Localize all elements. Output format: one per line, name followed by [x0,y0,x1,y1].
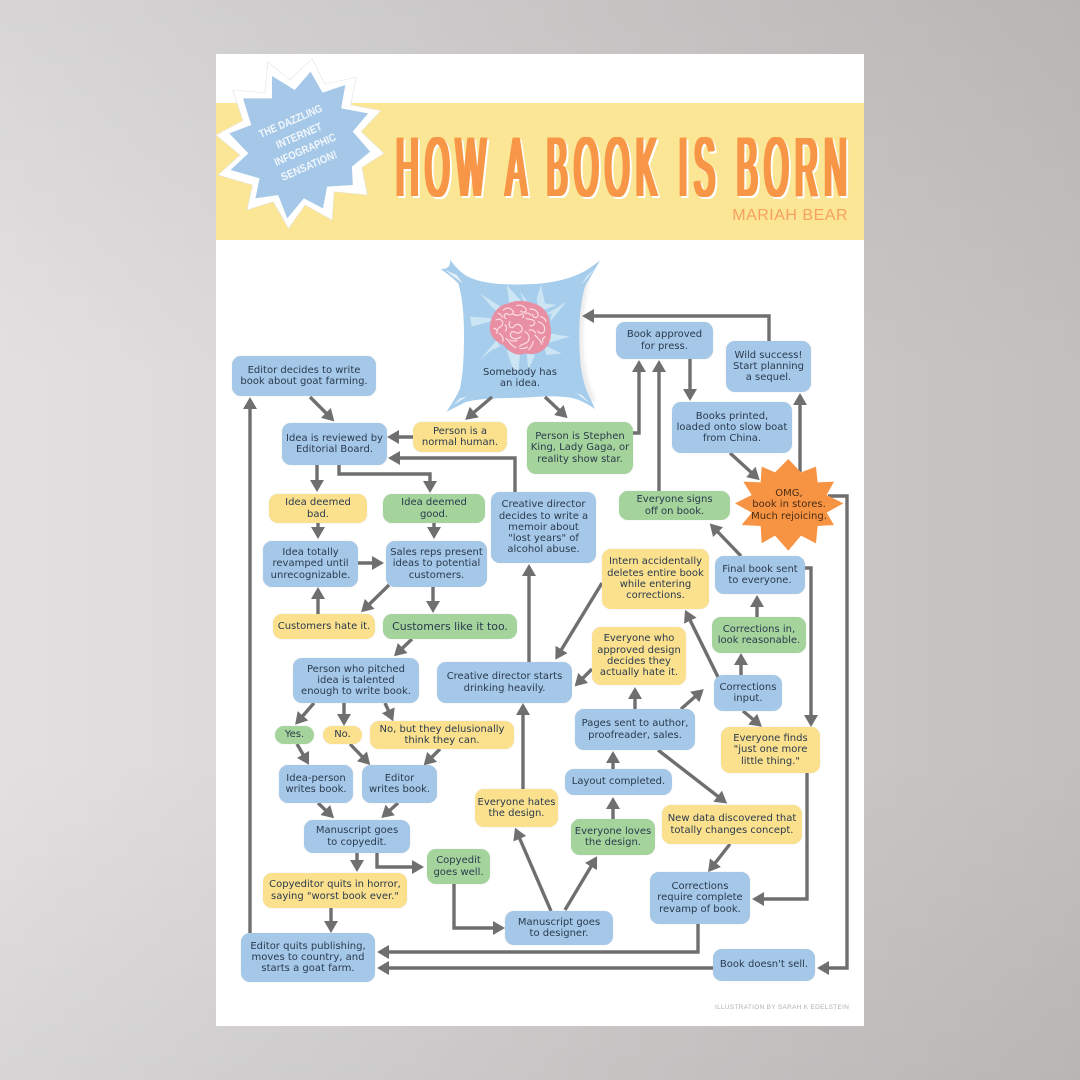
box: revamp: require complete [657,892,743,903]
box: designer: Manuscript goes [518,917,600,928]
box: corrections in: Corrections in, [723,624,795,635]
box: editor writes: writes book. [369,784,430,795]
box: revamp [650,872,750,924]
arrow: revamp to editor quits [386,924,698,952]
box: approved: for press. [641,340,688,352]
icon: idea sparks [470,285,570,370]
author: MARIAH BEAR [732,207,848,224]
box: idea-person writes: Idea-person [286,773,346,784]
arrow: signs off to approved [657,369,661,491]
box: new data: New data discovered that [668,813,796,824]
arrow: pages to hate it [633,696,637,709]
box: drinking [437,662,572,703]
arrow: pitched to delusional [385,703,390,713]
arrow: delusional to editor [430,749,440,759]
box: actually hate it: Everyone who [604,633,674,644]
box: revamped: Idea totally [282,547,339,558]
box: actually hate it: approved design [597,645,681,656]
arrow: printed to rejoicing [730,453,753,474]
box: everyone hates: Everyone hates [478,797,555,808]
arrow: corrections input to one more thing [743,711,755,721]
box: actually hate it: decides they [607,656,671,667]
box: pitched: Person who pitched [307,664,405,675]
box: printed: from China. [703,433,761,444]
box: revamped: revamped until [272,558,348,569]
box: yes [275,726,314,744]
box: editor quits: moves to country, and [252,952,364,963]
arrow: pages to corrections input [681,695,697,709]
box: new data [662,805,802,844]
box: everyone loves: Everyone loves [575,826,651,837]
box: editor quits [241,933,375,982]
box: delusional [370,721,514,749]
box: intern: corrections. [626,590,685,601]
credit: ILLUSTRATION BY SARAH K EDELSTEIN [715,1004,849,1011]
arrow: no to editor [350,744,364,758]
box: designer: to designer. [530,928,588,939]
text: OMG: OMG, [775,488,803,499]
box: approved: Book approved [627,329,702,340]
box: no: No. [334,729,351,740]
arrow: rejoicing to doesn't sell [826,496,847,968]
box: deemed good: Idea deemed [401,497,467,508]
box: customers like [383,614,517,639]
box: drinking: drinking heavily. [464,682,545,694]
box: Stephen King [527,422,633,474]
arrow: rejoicing to wild success [798,402,802,472]
box: editor writes: Editor [385,773,414,784]
arrow: brain to Stephen King [545,397,561,412]
text: OMG [751,488,827,522]
box: pitched: idea is talented [317,675,395,686]
box: revamp: revamp of book. [659,904,741,915]
box: pages: Pages sent to author, [582,718,688,729]
arrow: idea-person to copyedit [318,803,328,812]
box: pitched: enough to write book. [301,686,411,697]
box: customers hate: Customers hate it. [278,621,370,632]
arrow: goat editor to review [310,397,328,415]
arrow: designer to loves [565,864,592,910]
box: copyedit goes well: Copyedit [436,855,481,866]
box: normal human: Person is a [433,426,487,437]
box: doesn't sell: Book doesn't sell. [720,959,808,970]
box: one more thing: Everyone finds [733,733,808,744]
box: editor writes [362,765,437,803]
arrow: approved to printed [688,359,692,392]
box: copyedit: Manuscript goes [316,825,398,836]
arrow: hates to drinking [521,712,525,789]
box: memoir: alcohol abuse. [507,544,580,555]
poster sheet [216,54,864,1026]
box: intern [602,549,709,609]
arrow: doesn't sell to editor quits [386,966,713,970]
box: sales reps [386,541,487,587]
arrow: hate it to drinking [581,669,592,680]
box: delusional: think they can. [404,735,479,746]
box: signs off: off on book. [645,506,704,516]
box: editor quits: Editor quits publishing, [250,941,366,952]
box: doesn't sell [713,949,815,981]
arrow: final to signs off [716,530,741,556]
arrow: final to one more thing [805,568,811,718]
arrow: copyedit to goes well [377,853,415,867]
box: customers hate [273,614,375,639]
box: intern: Intern accidentally [609,556,702,567]
box: everyone loves: the design. [585,837,641,848]
text: OMG: book in stores. [752,499,826,510]
box: wild success: Start planning [733,361,804,372]
arrow: revamped to sales reps [358,561,375,565]
box: corrections input: input. [734,693,762,704]
box: printed [672,402,792,453]
box: goat editor [232,356,376,396]
box: idea-person writes: writes book. [285,784,347,795]
box: deemed bad [269,494,367,523]
box: intern: deletes entire book [607,568,704,579]
arrow: good to sales reps [432,523,436,530]
box: signs off [619,491,730,520]
box: Stephen King: reality show star. [537,454,623,465]
box: Stephen King: King, Lady Gaga, or [531,442,629,453]
box: copyedit goes well: goes well. [433,866,484,878]
arrow: corrections in to final [755,604,759,617]
box: review: Editorial Board. [296,444,373,455]
arrow: loves to layout [611,806,615,819]
box: one more thing: "just one more [734,744,807,755]
box: review: Idea is reviewed by [286,433,383,444]
box: final: Final book sent [722,564,798,575]
icon: brain [490,301,551,355]
box: pages [575,709,695,750]
box: everyone hates: the design. [489,808,544,819]
box: drinking: Creative director starts [447,671,562,682]
arrow: new data to revamp [714,844,730,865]
box: pages: proofreader, sales. [588,730,682,740]
box: corrections input [714,675,782,711]
box: memoir: memoir about [508,522,579,533]
box: layout [565,769,672,795]
box: copyeditor quits: saying "worst book ever." [271,890,399,902]
box: corrections in: look reasonable. [718,635,800,646]
box: memoir [491,492,596,563]
arrow: memoir to review [397,458,515,493]
arrow: drinking to memoir [527,573,531,662]
box: everyone loves [571,819,655,855]
box: revamp: Corrections [672,881,728,892]
arrow: brain to normal human [472,397,492,414]
arrow: Stephen King to approved [633,369,639,433]
badge: starburst [216,58,384,228]
arrow: layout to pages [611,760,615,769]
box: no [323,726,362,744]
arrow: review to good [339,465,430,484]
box: normal human [413,422,507,452]
box: printed: loaded onto slow boat [677,422,787,433]
box: deemed good: good. [420,508,448,520]
box: goat editor: Editor decides to write [248,365,360,376]
box: idea-person writes [279,765,353,803]
box: final: to everyone. [728,575,792,586]
badge: starburst: THE DAZZLING [257,103,324,141]
arrow: editor quits to goat editor [248,406,252,933]
box: review [282,423,387,465]
arrow: normal human to review [396,435,413,439]
badge: starburst: SENSATION! [279,149,339,184]
text: somebody has an idea: Somebody has [483,367,557,378]
box: delusional: No, but they delusionally [380,724,504,735]
text: somebody has an idea [483,367,557,389]
box: printed: Books printed, [696,411,768,422]
box: intern: while entering [620,579,691,590]
badge: starburst: INFOGRAPHIC [273,132,338,169]
arrow: bad to revamped [316,523,320,530]
box: copyeditor quits: Copyeditor quits in horror, [269,879,401,890]
box: one more thing [721,727,820,773]
arrow: corrections input to corrections in [739,662,743,675]
box: pitched [293,658,419,703]
box: wild success: a sequel. [746,372,791,383]
box: deemed good [383,494,485,523]
box: deemed bad: Idea deemed [285,497,351,508]
box: copyedit: to copyedit. [327,836,387,848]
panel: idea burst [441,260,600,412]
box: actually hate it [592,627,686,685]
arrow: copyedit to copyeditor quits [355,853,359,863]
box: Stephen King: Person is Stephen [535,431,625,442]
box: signs off: Everyone signs [636,494,713,505]
box: copyedit [304,820,410,853]
box: copyedit goes well [427,849,490,884]
title banner [216,103,864,240]
orange starburst [735,459,843,551]
box: sales reps: Sales reps present [390,547,483,558]
arrow: sales reps to like [431,587,435,604]
box: wild success: Wild success! [735,350,802,361]
box: new data: totally changes concept. [670,824,793,836]
arrow: corrections input to intern [689,618,718,677]
box: memoir: decides to write a [499,511,588,522]
arrow: yes to idea-person [297,744,304,757]
arrow: intern to drinking [560,583,602,652]
box: corrections input: Corrections [720,682,776,693]
box: wild success [726,341,811,392]
box: corrections in [712,617,806,653]
box: sales reps: ideas to potential [393,558,480,569]
badge: starburst: INTERNET [274,121,324,152]
box: memoir: Creative director [502,499,585,510]
arrow: pitched to yes [301,703,314,718]
box: actually hate it: actually hate it. [600,667,678,678]
box: copyeditor quits [263,873,407,908]
box: everyone hates [475,789,558,827]
box: revamped [263,541,358,587]
arrow: like to pitched [400,639,412,650]
box: editor quits: starts a goat farm. [261,963,355,974]
arrow: editor to copyedit [388,803,398,812]
box: yes: Yes. [285,729,304,740]
box: goat editor: book about goat farming. [240,376,368,387]
arrow: one more thing to revamp [761,773,807,899]
box: layout: Layout completed. [572,776,665,787]
arrow: pages to new data [658,750,720,798]
box: customers like: Customers like it too. [392,620,508,633]
title: HOW A BOOK IS BORN [394,120,851,214]
arrow: goes well to designer [454,884,496,928]
box: final [715,556,805,594]
box: deemed bad: bad. [307,508,329,520]
box: sales reps: customers. [409,570,464,581]
box: revamped: unrecognizable. [271,570,350,581]
arrow: sales reps to hate [368,585,389,606]
text: somebody has an idea: an idea. [500,378,540,389]
text: OMG: Much rejoicing. [751,511,827,522]
arrow: review to bad [315,465,319,483]
box: designer [505,911,613,945]
arrow: wild success to brain [591,316,769,341]
box: normal human: normal human. [422,437,498,448]
box: one more thing: little thing." [741,756,800,767]
arrow: pitched to no [342,703,346,717]
arrow: copyeditor quits to editor quits [329,908,333,924]
arrow: hate to revamped [316,596,320,614]
arrow: designer to hates [519,836,551,911]
box: memoir: "lost years" of [508,533,579,544]
box: approved [616,322,713,359]
